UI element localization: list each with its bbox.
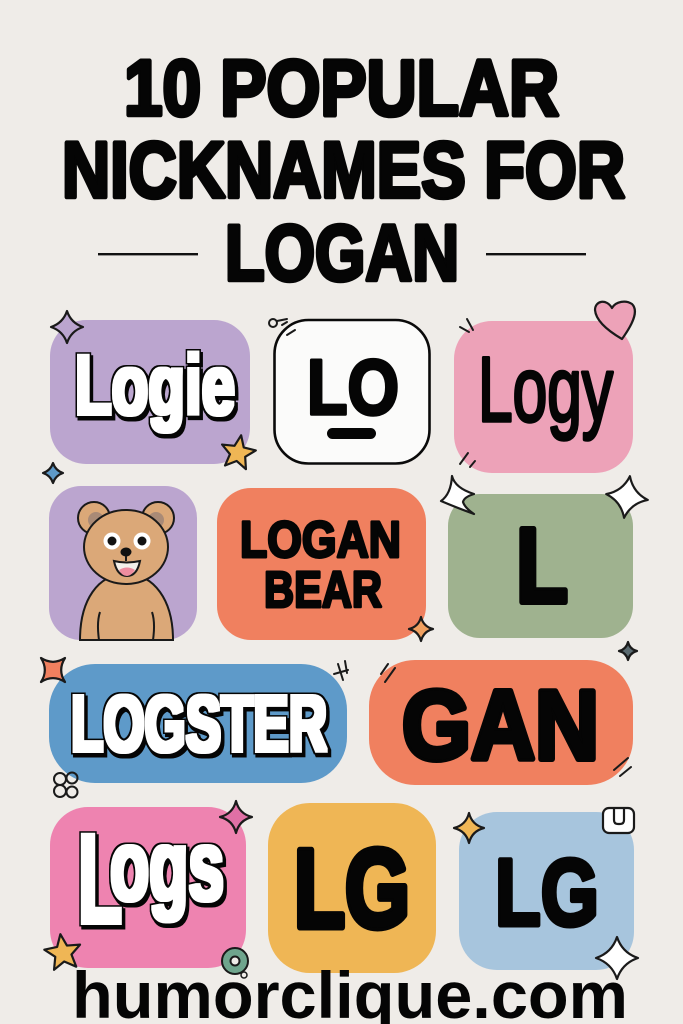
- icon: purple sparkle: [51, 311, 83, 343]
- panel: LG blue: [459, 812, 634, 970]
- Logs wordmark: [78, 808, 224, 951]
- icon: hash mark: [334, 661, 348, 680]
- panel: Gan: GAN: [402, 670, 599, 780]
- Logs wordmark: L: [78, 808, 122, 951]
- panel: Logie: [50, 320, 250, 464]
- icon: pink sparkle: [220, 801, 252, 833]
- panel: Logster: LOGSTER: [71, 679, 327, 768]
- icon: clover: [54, 772, 78, 798]
- icon: tick marks: [460, 453, 475, 467]
- panel: L: L: [516, 507, 568, 625]
- panel: Logan Bear: LOGAN: [240, 511, 401, 568]
- title: [62, 43, 625, 297]
- panel: Logster: [49, 664, 347, 783]
- icon: tick marks: [381, 664, 395, 682]
- panel: LO: [274, 320, 430, 464]
- icon: rounded square: [603, 808, 634, 833]
- panel: LO: LO: [307, 343, 399, 431]
- icon: bear: [78, 502, 174, 640]
- icon: heart: [595, 302, 635, 339]
- panel: LG blue: LG: [495, 840, 599, 946]
- panel: Logs: [50, 807, 246, 968]
- icon: yellow star: [219, 432, 258, 470]
- panel: bear: [49, 486, 197, 640]
- panel: Logan Bear: BEAR: [264, 561, 382, 618]
- panel: L: [448, 494, 633, 638]
- icon: white sparkle: [603, 473, 651, 521]
- panel: LG yellow: LG: [294, 827, 410, 951]
- panel: LG yellow: [268, 803, 436, 973]
- icon: yellow sparkle: [454, 813, 484, 843]
- icon: blue sparkle: [43, 463, 63, 483]
- icon: orange sparkle: [409, 617, 433, 641]
- panel: Logy: Logy: [478, 339, 613, 441]
- icon: key loop: [269, 319, 295, 335]
- icon: tick marks: [460, 319, 473, 332]
- icon: white star: [441, 476, 474, 514]
- icon: green ring: [222, 948, 248, 978]
- title: 10 POPULAR: [124, 43, 559, 132]
- panel: Logan Bear: [217, 488, 426, 640]
- panel: Logy: [454, 321, 633, 473]
- icon: white sparkle: [596, 937, 638, 979]
- title: LOGAN: [225, 208, 459, 297]
- panel: Logie: Logie: [75, 338, 235, 432]
- icon: small dark sparkle: [619, 642, 637, 660]
- icon: tick marks: [614, 758, 631, 776]
- icon: yellow star: [42, 932, 83, 971]
- icon: orange star: [29, 646, 77, 694]
- Logs wordmark: ogs: [110, 810, 224, 922]
